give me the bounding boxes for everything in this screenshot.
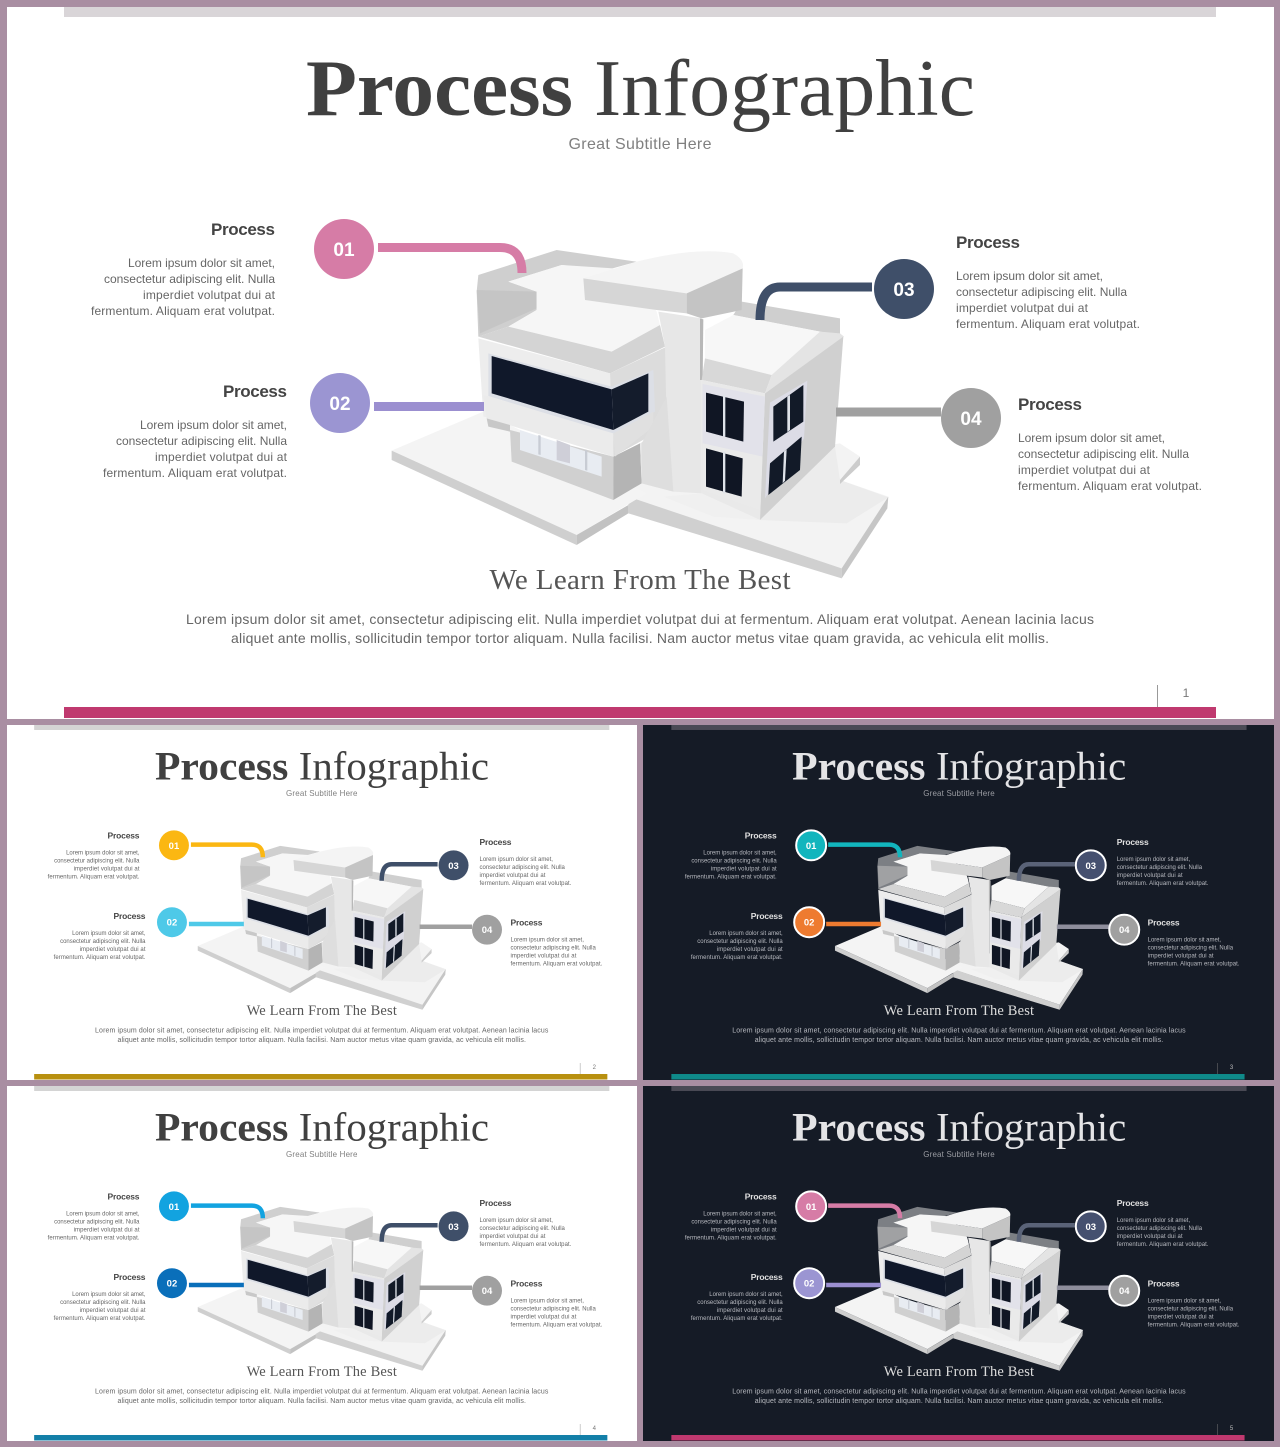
subtitle: Great Subtitle Here <box>568 136 712 153</box>
text block 02: Process <box>114 1272 146 1282</box>
text block 04: Process <box>1018 395 1082 414</box>
badge 02 <box>157 1268 187 1298</box>
text block 01: Lorem ipsum dolor sit amet, <box>128 256 275 270</box>
text block 03: imperdiet volutpat dui at <box>1117 873 1183 879</box>
title: Process <box>306 45 573 133</box>
text block 01: consectetur adipiscing elit. Nulla <box>54 1219 140 1225</box>
bottom bar <box>34 1074 607 1079</box>
text block 03: Process <box>1117 837 1149 847</box>
page number: 4 <box>593 1426 597 1432</box>
badge 02 <box>310 373 370 433</box>
subtitle: Great Subtitle Here <box>923 1150 995 1159</box>
body paragraph <box>186 611 1094 646</box>
connector 02 <box>374 402 484 411</box>
panel: teal dark slide <box>643 725 1274 1080</box>
text block 04: imperdiet volutpat dui at <box>1018 463 1151 477</box>
badge 02 <box>794 1268 824 1298</box>
text block 04: consectetur adipiscing elit. Nulla <box>510 946 597 952</box>
text block 01: Process <box>211 220 275 239</box>
text block 01: Lorem ipsum dolor sit amet, <box>66 850 140 856</box>
text block 02: consectetur adipiscing elit. Nulla <box>116 434 287 448</box>
badge 01 <box>796 1191 826 1221</box>
badge 04 <box>472 1276 502 1306</box>
text block 01: consectetur adipiscing elit. Nulla <box>691 858 777 864</box>
subtitle: Great Subtitle Here <box>923 789 995 798</box>
badge 04 <box>1109 915 1139 945</box>
text block 01: fermentum. Aliquam erat volutpat. <box>48 874 140 880</box>
text block 04: Process <box>510 918 543 928</box>
text block 01: fermentum. Aliquam erat volutpat. <box>48 1235 140 1241</box>
badge 04 <box>1109 1276 1139 1306</box>
title: Infographic <box>594 45 975 133</box>
title <box>792 743 1126 788</box>
body paragraph <box>732 1389 1186 1405</box>
badge 02: 02 <box>167 1279 177 1290</box>
text block 03: Process <box>480 1198 512 1208</box>
badge 02: 02 <box>804 918 814 929</box>
text block 02: fermentum. Aliquam erat volutpat. <box>103 466 287 480</box>
badge 03: 03 <box>1085 861 1096 872</box>
text block 02: consectetur adipiscing elit. Nulla <box>697 939 783 945</box>
text block 03: consectetur adipiscing elit. Nulla <box>1117 865 1203 871</box>
page number: 5 <box>1230 1426 1234 1432</box>
text block 03 <box>1117 1198 1209 1248</box>
text block 04: fermentum. Aliquam erat volutpat. <box>1148 1323 1240 1329</box>
text block 01: fermentum. Aliquam erat volutpat. <box>91 304 275 318</box>
badge 03: 03 <box>893 280 915 301</box>
badge 03: 03 <box>448 1222 459 1233</box>
text block 04: Lorem ipsum dolor sit amet, <box>1148 938 1221 944</box>
text block 03: Lorem ipsum dolor sit amet, <box>1117 1218 1190 1224</box>
body paragraph: Lorem ipsum dolor sit amet, consectetur adipiscing elit. Nulla imperdiet volutpat dui at fermentum. Aliquam erat volutpat. Aenean lacinia lacus <box>732 1028 1186 1035</box>
body paragraph <box>732 1028 1186 1044</box>
text block 04: Lorem ipsum dolor sit amet, <box>510 1299 584 1305</box>
text block 03: imperdiet volutpat dui at <box>1117 1234 1183 1240</box>
badge 04 <box>941 388 1001 448</box>
top bar <box>671 725 1247 730</box>
badge 01: 01 <box>806 841 816 852</box>
connector 04 <box>420 1283 472 1292</box>
text block 03: imperdiet volutpat dui at <box>480 1234 546 1240</box>
top bar <box>64 7 1216 17</box>
illustration: building <box>198 1207 446 1371</box>
text block 03: fermentum. Aliquam erat volutpat. <box>1117 881 1209 887</box>
text block 02: consectetur adipiscing elit. Nulla <box>697 1300 783 1306</box>
text block 03: Lorem ipsum dolor sit amet, <box>1117 857 1190 863</box>
illustration: building <box>392 250 888 578</box>
body paragraph: aliquet ante mollis, sollicitudin tempor tortor aliquam. Nulla facilisi. Nam auctor metus vitae quam gravida, ac vehicula elit mollis. <box>755 1037 1163 1044</box>
connector 01 <box>191 845 263 857</box>
text block 03 <box>1117 837 1209 887</box>
text block 02: Lorem ipsum dolor sit amet, <box>709 931 783 937</box>
body paragraph: Lorem ipsum dolor sit amet, consectetur adipiscing elit. Nulla imperdiet volutpat dui at fermentum. Aliquam erat volutpat. Aenean lacinia lacus <box>95 1389 549 1396</box>
text block 04: imperdiet volutpat dui at <box>1148 1315 1214 1321</box>
text block 04: Process <box>1148 918 1180 928</box>
top bar <box>34 725 609 730</box>
text block 01 <box>685 1191 777 1241</box>
page number <box>1217 1424 1234 1435</box>
text block 01: imperdiet volutpat dui at <box>711 866 777 872</box>
body paragraph: Lorem ipsum dolor sit amet, consectetur adipiscing elit. Nulla imperdiet volutpat dui at fermentum. Aliquam erat volutpat. Aenean lacinia lacus <box>186 611 1094 627</box>
body paragraph: aliquet ante mollis, sollicitudin tempor tortor aliquam. Nulla facilisi. Nam auctor metus vitae quam gravida, ac vehicula elit mollis. <box>118 1398 526 1405</box>
text block 02: fermentum. Aliquam erat volutpat. <box>54 1316 146 1322</box>
text block 03 <box>480 837 572 887</box>
panel: main white slide <box>7 7 1274 719</box>
text block 04 <box>510 918 603 968</box>
connector 02 <box>826 1280 881 1289</box>
connector 04 <box>836 408 941 416</box>
text block 01: consectetur adipiscing elit. Nulla <box>691 1219 777 1225</box>
text block 04: Lorem ipsum dolor sit amet, <box>510 938 584 944</box>
text block 03: consectetur adipiscing elit. Nulla <box>1117 1226 1203 1232</box>
text block 01: imperdiet volutpat dui at <box>74 1227 140 1233</box>
text block 02: consectetur adipiscing elit. Nulla <box>60 939 146 945</box>
text block 02: Lorem ipsum dolor sit amet, <box>72 931 146 937</box>
title <box>155 1104 489 1149</box>
text block 02 <box>54 911 146 961</box>
text block 01 <box>685 830 777 880</box>
text block 01 <box>48 830 140 880</box>
badge 01: 01 <box>806 1202 816 1213</box>
text block 02: Lorem ipsum dolor sit amet, <box>140 418 287 432</box>
page number: 2 <box>593 1065 597 1071</box>
text block 03: Process <box>1117 1198 1149 1208</box>
text block 02: Process <box>751 1272 783 1282</box>
text block 03: fermentum. Aliquam erat volutpat. <box>480 881 572 887</box>
text block 02: imperdiet volutpat dui at <box>717 1308 783 1314</box>
text block 01 <box>91 220 276 318</box>
badge 01: 01 <box>333 240 355 261</box>
badge 04 <box>472 915 502 945</box>
top bar <box>34 1086 609 1091</box>
text block 04: fermentum. Aliquam erat volutpat. <box>1018 479 1202 493</box>
page number: 1 <box>1183 686 1190 700</box>
text block 03: consectetur adipiscing elit. Nulla <box>480 1226 566 1232</box>
title: Process <box>155 1104 288 1149</box>
text block 01: Lorem ipsum dolor sit amet, <box>703 850 777 856</box>
body paragraph: Lorem ipsum dolor sit amet, consectetur adipiscing elit. Nulla imperdiet volutpat dui at fermentum. Aliquam erat volutpat. Aenean lacinia lacus <box>732 1389 1186 1396</box>
badge 02 <box>794 907 824 937</box>
body paragraph: Lorem ipsum dolor sit amet, consectetur adipiscing elit. Nulla imperdiet volutpat dui at fermentum. Aliquam erat volutpat. Aenean lacinia lacus <box>95 1028 549 1035</box>
tagline: We Learn From The Best <box>884 1364 1034 1380</box>
text block 02 <box>691 911 783 961</box>
badge 04: 04 <box>960 409 982 430</box>
title <box>155 743 489 788</box>
badge 02: 02 <box>804 1279 814 1290</box>
text block 02: Lorem ipsum dolor sit amet, <box>72 1292 146 1298</box>
text block 03: fermentum. Aliquam erat volutpat. <box>480 1242 572 1248</box>
text block 01: imperdiet volutpat dui at <box>711 1227 777 1233</box>
body paragraph: aliquet ante mollis, sollicitudin tempor tortor aliquam. Nulla facilisi. Nam auctor metus vitae quam gravida, ac vehicula elit mollis. <box>231 630 1049 646</box>
text block 03 <box>956 233 1140 331</box>
page number <box>1157 685 1190 707</box>
text block 02: imperdiet volutpat dui at <box>80 1308 146 1314</box>
text block 03: fermentum. Aliquam erat volutpat. <box>956 317 1140 331</box>
panel: gold white slide <box>7 725 637 1080</box>
badge 02: 02 <box>167 918 177 929</box>
bottom bar <box>34 1435 607 1440</box>
text block 04: consectetur adipiscing elit. Nulla <box>510 1307 597 1313</box>
badge 01 <box>796 830 826 860</box>
text block 04: Lorem ipsum dolor sit amet, <box>1148 1299 1221 1305</box>
panel: pink dark slide <box>643 1086 1274 1441</box>
connector 02 <box>189 1280 244 1289</box>
text block 01: imperdiet volutpat dui at <box>74 866 140 872</box>
text block 04: consectetur adipiscing elit. Nulla <box>1148 1307 1234 1313</box>
text block 03: fermentum. Aliquam erat volutpat. <box>1117 1242 1209 1248</box>
bottom bar <box>671 1435 1245 1440</box>
text block 01: fermentum. Aliquam erat volutpat. <box>685 874 777 880</box>
title: Infographic <box>936 743 1126 788</box>
text block 04: imperdiet volutpat dui at <box>510 954 577 960</box>
subtitle: Great Subtitle Here <box>286 789 358 798</box>
title: Process <box>792 1104 925 1149</box>
connector 04 <box>1057 1283 1109 1292</box>
title <box>792 1104 1126 1149</box>
connector 04 <box>420 922 472 931</box>
text block 02: imperdiet volutpat dui at <box>155 450 288 464</box>
badge 04: 04 <box>482 1286 493 1297</box>
badge 02 <box>157 907 187 937</box>
badge 03: 03 <box>1085 1222 1096 1233</box>
text block 01: Process <box>745 830 777 840</box>
body paragraph <box>95 1389 549 1405</box>
connector 02 <box>189 919 244 928</box>
badge 03 <box>439 1211 469 1241</box>
text block 02: fermentum. Aliquam erat volutpat. <box>691 955 783 961</box>
text block 04: fermentum. Aliquam erat volutpat. <box>510 1323 603 1329</box>
page number <box>580 1063 597 1074</box>
title <box>306 45 975 133</box>
badge 04: 04 <box>482 925 493 936</box>
text block 04: imperdiet volutpat dui at <box>510 1315 577 1321</box>
text block 02: consectetur adipiscing elit. Nulla <box>60 1300 146 1306</box>
text block 01: Process <box>745 1191 777 1201</box>
text block 04 <box>510 1279 603 1329</box>
body paragraph: aliquet ante mollis, sollicitudin tempor tortor aliquam. Nulla facilisi. Nam auctor metus vitae quam gravida, ac vehicula elit mollis. <box>118 1037 526 1044</box>
tagline: We Learn From The Best <box>247 1364 397 1380</box>
badge 01 <box>314 219 374 279</box>
connector 03 <box>1019 1225 1075 1242</box>
connector 01 <box>191 1206 263 1218</box>
body paragraph <box>95 1028 549 1044</box>
text block 02 <box>103 382 288 480</box>
badge 04: 04 <box>1119 1286 1130 1297</box>
text block 01: Process <box>108 830 140 840</box>
connector 03 <box>1019 864 1075 881</box>
text block 01: imperdiet volutpat dui at <box>143 288 276 302</box>
connector 03 <box>382 864 438 881</box>
badge 03: 03 <box>448 861 459 872</box>
title: Infographic <box>936 1104 1126 1149</box>
badge 03 <box>1076 850 1106 880</box>
text block 02: imperdiet volutpat dui at <box>717 947 783 953</box>
text block 02: Lorem ipsum dolor sit amet, <box>709 1292 783 1298</box>
connector 01 <box>378 248 522 273</box>
text block 03: Lorem ipsum dolor sit amet, <box>956 269 1103 283</box>
text block 01: fermentum. Aliquam erat volutpat. <box>685 1235 777 1241</box>
text block 04: Process <box>1148 1279 1180 1289</box>
bottom bar <box>64 707 1216 718</box>
text block 04: consectetur adipiscing elit. Nulla <box>1148 946 1234 952</box>
text block 04: consectetur adipiscing elit. Nulla <box>1018 447 1189 461</box>
text block 01: Lorem ipsum dolor sit amet, <box>66 1211 140 1217</box>
title: Process <box>155 743 288 788</box>
text block 02: Process <box>223 382 287 401</box>
text block 03: imperdiet volutpat dui at <box>480 873 546 879</box>
connector 03 <box>760 287 872 320</box>
text block 03: Lorem ipsum dolor sit amet, <box>480 1218 553 1224</box>
badge 02: 02 <box>329 394 351 415</box>
text block 04: imperdiet volutpat dui at <box>1148 954 1214 960</box>
text block 02: fermentum. Aliquam erat volutpat. <box>691 1316 783 1322</box>
text block 01: Lorem ipsum dolor sit amet, <box>703 1211 777 1217</box>
text block 03 <box>480 1198 572 1248</box>
text block 03: consectetur adipiscing elit. Nulla <box>956 285 1127 299</box>
subtitle: Great Subtitle Here <box>286 1150 358 1159</box>
text block 04: fermentum. Aliquam erat volutpat. <box>1148 962 1240 968</box>
panel: blue white slide <box>7 1086 637 1441</box>
badge 03 <box>1076 1211 1106 1241</box>
title: Infographic <box>299 743 489 788</box>
badge 01: 01 <box>169 1202 179 1213</box>
connector 04 <box>1057 922 1109 931</box>
top bar <box>671 1086 1247 1091</box>
text block 02: Process <box>751 911 783 921</box>
text block 02: imperdiet volutpat dui at <box>80 947 146 953</box>
text block 04: Lorem ipsum dolor sit amet, <box>1018 431 1165 445</box>
text block 02 <box>691 1272 783 1322</box>
page number: 3 <box>1230 1065 1234 1071</box>
badge 03 <box>874 259 934 319</box>
text block 04 <box>1148 1279 1240 1329</box>
illustration: building <box>835 1207 1083 1371</box>
connector 01 <box>828 845 900 857</box>
text block 04 <box>1018 395 1202 493</box>
text block 01: consectetur adipiscing elit. Nulla <box>54 858 140 864</box>
illustration: building <box>198 846 446 1010</box>
tagline: We Learn From The Best <box>247 1003 397 1019</box>
badge 01 <box>159 1191 189 1221</box>
text block 01: Process <box>108 1191 140 1201</box>
text block 01 <box>48 1191 140 1241</box>
text block 03: Process <box>480 837 512 847</box>
badge 03 <box>439 850 469 880</box>
text block 04: fermentum. Aliquam erat volutpat. <box>510 962 603 968</box>
tagline: We Learn From The Best <box>490 564 790 596</box>
connector 01 <box>828 1206 900 1218</box>
badge 04: 04 <box>1119 925 1130 936</box>
title: Infographic <box>299 1104 489 1149</box>
bottom bar <box>671 1074 1245 1079</box>
text block 02: fermentum. Aliquam erat volutpat. <box>54 955 146 961</box>
text block 04 <box>1148 918 1240 968</box>
text block 03: imperdiet volutpat dui at <box>956 301 1089 315</box>
badge 01 <box>159 830 189 860</box>
body paragraph: aliquet ante mollis, sollicitudin tempor tortor aliquam. Nulla facilisi. Nam auctor metus vitae quam gravida, ac vehicula elit mollis. <box>755 1398 1163 1405</box>
text block 03: consectetur adipiscing elit. Nulla <box>480 865 566 871</box>
text block 04: Process <box>510 1279 543 1289</box>
text block 02 <box>54 1272 146 1322</box>
tagline: We Learn From The Best <box>884 1003 1034 1019</box>
connector 02 <box>826 919 881 928</box>
text block 02: Process <box>114 911 146 921</box>
page number <box>1217 1063 1234 1074</box>
page number <box>580 1424 597 1435</box>
illustration: building <box>835 846 1083 1010</box>
title: Process <box>792 743 925 788</box>
badge 01: 01 <box>169 841 179 852</box>
text block 03: Lorem ipsum dolor sit amet, <box>480 857 553 863</box>
connector 03 <box>382 1225 438 1242</box>
text block 03: Process <box>956 233 1020 252</box>
text block 01: consectetur adipiscing elit. Nulla <box>104 272 275 286</box>
